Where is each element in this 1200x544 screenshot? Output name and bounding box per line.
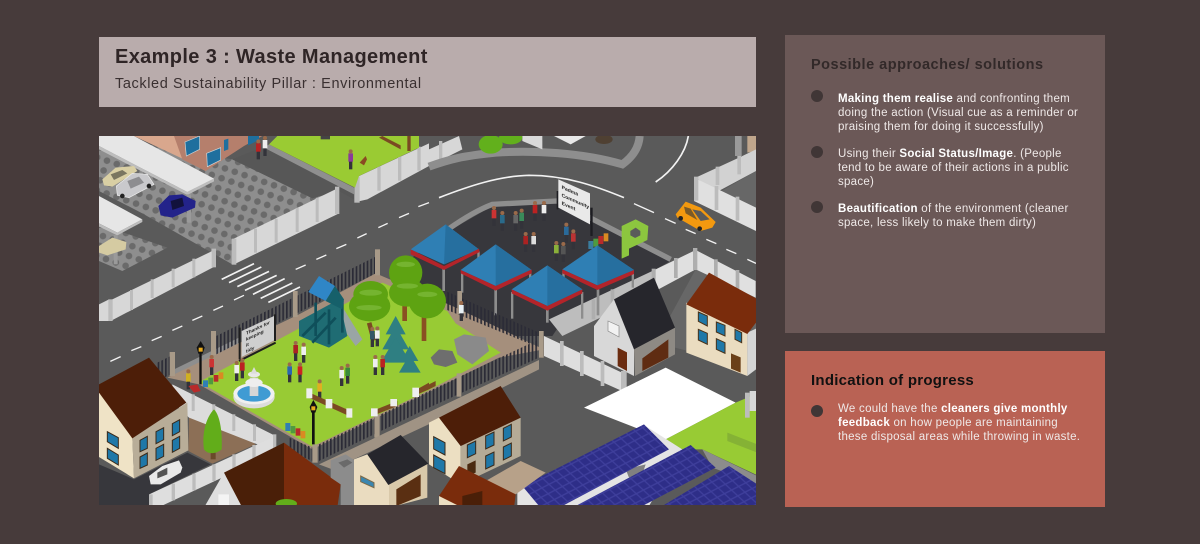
park notice board: tidy <box>246 345 255 355</box>
rocks <box>431 334 489 367</box>
bullet 3 <box>811 201 823 213</box>
lower right walled lot <box>549 248 759 369</box>
approach: realise: Making them realise and confronting them <box>838 93 1070 105</box>
low wall by white pad <box>544 336 627 398</box>
park trees <box>349 255 446 341</box>
bullet 1 <box>811 90 823 102</box>
bottom centre house <box>204 443 356 508</box>
grey garage house <box>594 278 675 376</box>
paved path around park <box>167 273 544 449</box>
park lawn <box>199 283 501 447</box>
white pad and lawn <box>584 368 759 484</box>
approach: beautification: Beautification of the environment (cleaner <box>838 203 1069 215</box>
left house <box>99 358 211 508</box>
approaches heading: Possible approaches/ solutions <box>811 57 1044 73</box>
parked cars <box>99 166 196 255</box>
garden yard with wall <box>149 384 276 511</box>
solar panel roofs <box>517 424 757 506</box>
progress text <box>838 403 1080 443</box>
fir trees <box>381 316 421 373</box>
right walled lot <box>694 149 756 231</box>
approach: social status <box>838 148 1069 188</box>
approach: beautification <box>838 203 1069 229</box>
apartment building <box>134 136 262 171</box>
park benches <box>306 381 436 418</box>
approach: social status: space) <box>838 176 874 188</box>
small garage house <box>354 435 428 508</box>
iron fences <box>157 249 544 469</box>
park notice board: it <box>246 342 249 349</box>
parking P marker <box>622 219 648 259</box>
cream house right <box>686 273 756 376</box>
community event sign: Event <box>562 201 575 213</box>
panel: possible approaches <box>785 35 1105 333</box>
progress text: feedback on how people are maintaining <box>838 417 1058 429</box>
panel: indication of progress <box>785 351 1105 507</box>
road markings <box>110 136 756 361</box>
community event sign: Padma <box>562 185 578 198</box>
grey verge <box>174 338 239 377</box>
event waste bins <box>588 233 608 249</box>
approach: social status: tend to be aware of their actions in a public <box>838 162 1069 174</box>
approach: realise: praising them for doing it successfully) <box>838 121 1044 133</box>
road surface <box>99 136 756 505</box>
north curb and island <box>429 131 756 167</box>
boundary walls <box>99 136 462 321</box>
event plaza <box>396 201 671 336</box>
person by fence <box>459 301 464 321</box>
event visitors <box>492 201 576 262</box>
playground <box>299 276 362 348</box>
house lower middle <box>429 386 546 508</box>
approach: beautification: space, less likely to make them dirty) <box>838 217 1036 229</box>
community event sign <box>557 179 593 236</box>
approach: social status: Using their Social Status/Image. (People <box>838 148 1062 160</box>
dog walker on lawn <box>256 136 411 169</box>
blue event tents <box>411 224 634 323</box>
parking canopies <box>99 136 214 264</box>
parking lot <box>99 136 354 271</box>
progress heading: Indication of progress <box>811 372 974 389</box>
fountain <box>233 367 275 408</box>
title panel <box>99 37 756 107</box>
park notice board: keeping <box>246 329 264 343</box>
park notice board <box>239 314 276 361</box>
progress text: We could have the cleaners give monthly <box>838 403 1068 415</box>
approach: realise <box>838 93 1078 133</box>
orange car <box>676 202 716 231</box>
bullet 2 <box>811 146 823 158</box>
park lawn top <box>269 136 419 188</box>
park waste bins <box>188 372 305 438</box>
subtitle: Tackled Sustainability Pillar : Environmental <box>115 76 422 92</box>
title heading: Example 3 : Waste Management <box>115 46 428 68</box>
lamp posts <box>197 341 317 444</box>
approach: realise: doing the action (Visual cue as a reminder or <box>838 107 1078 119</box>
isometric neighbourhood illustration <box>99 136 756 505</box>
community event sign: Community <box>562 193 589 211</box>
park visitors <box>186 326 385 399</box>
progress text: these disposal areas while throwing in waste. <box>838 431 1080 443</box>
bullet 4 <box>811 405 823 417</box>
park notice board: Thanks for <box>246 320 270 337</box>
